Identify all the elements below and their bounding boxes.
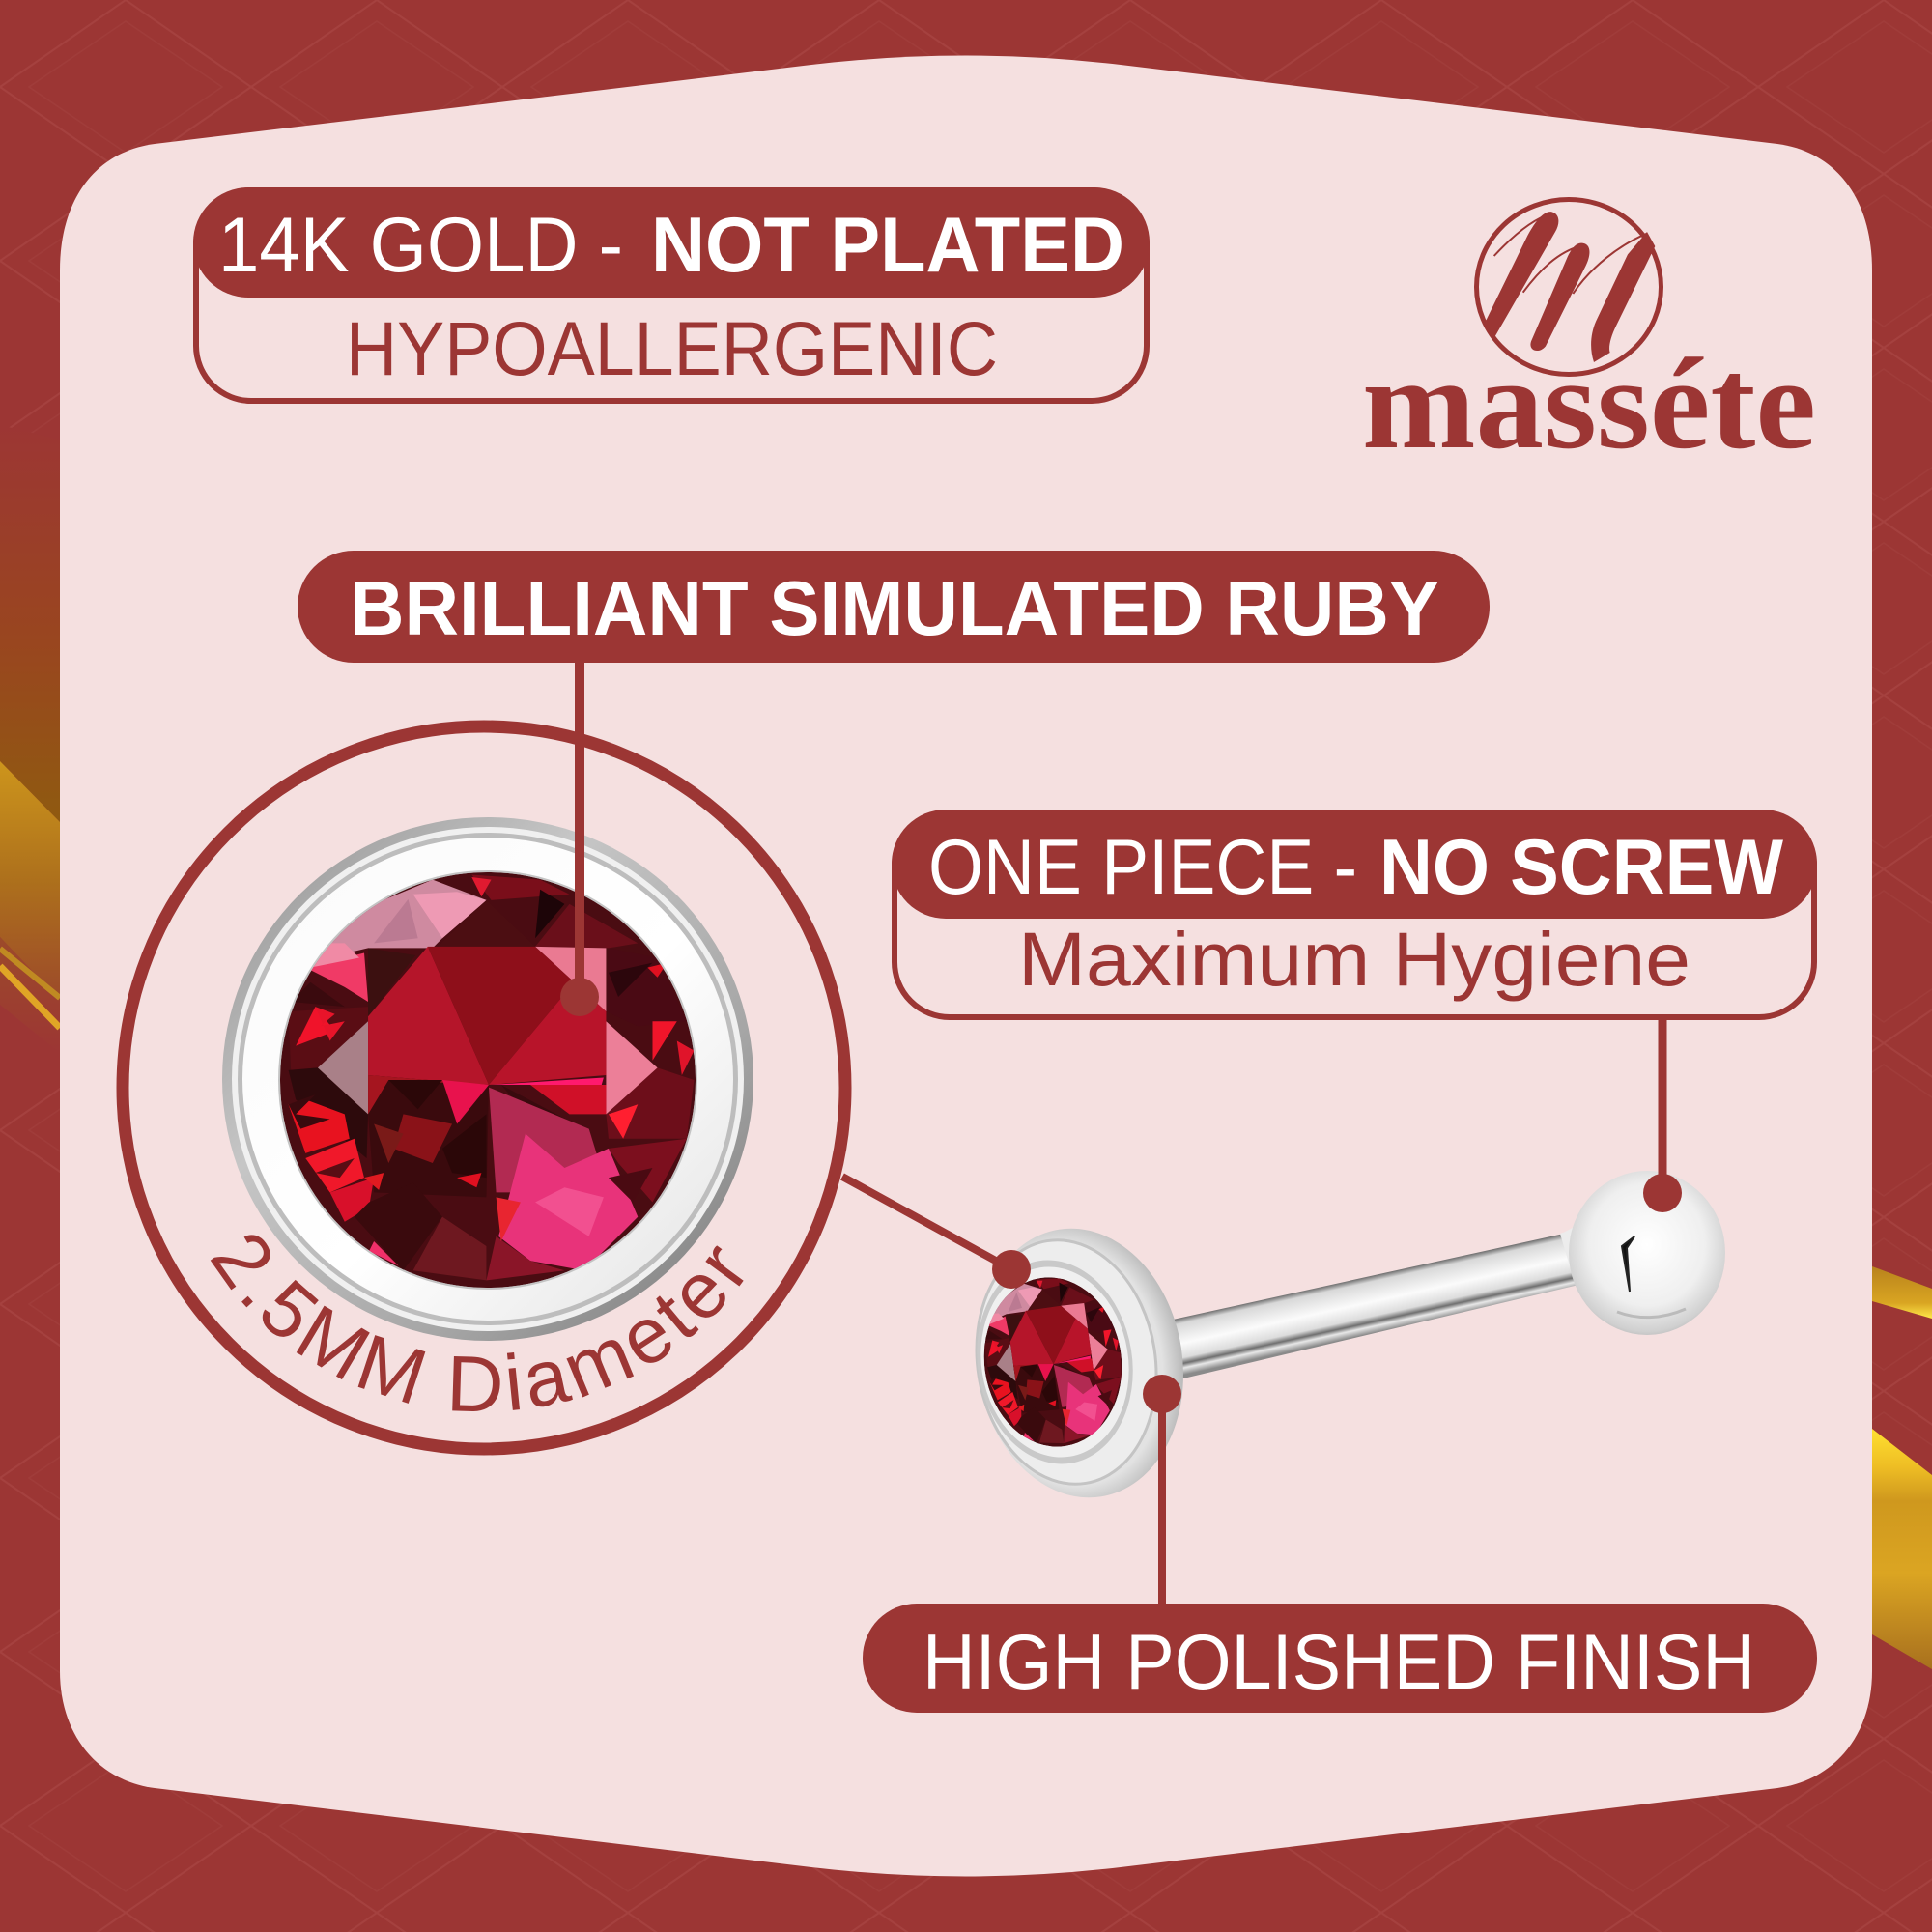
bezel disc xyxy=(957,1213,1203,1513)
callout line: one piece to ball xyxy=(1643,1020,1682,1212)
badge: 14K gold not plated: 14K GOLD - xyxy=(218,202,623,289)
callout line: ruby xyxy=(560,663,599,1016)
enlarged detail circle xyxy=(116,721,852,1455)
metal bezel xyxy=(222,817,753,1341)
logo: massete xyxy=(1362,199,1816,476)
callout line: magnify to stud xyxy=(842,1177,1031,1289)
badge: 14K gold not plated: NOT PLATED xyxy=(651,202,1124,289)
heading: brilliant simulated ruby: BRILLIANT SIMULATED RUBY xyxy=(350,565,1439,651)
small gem xyxy=(973,1268,1133,1456)
badge: one piece no screw xyxy=(892,810,1817,1017)
pin xyxy=(1164,1232,1591,1378)
ruby gem xyxy=(280,872,696,1288)
badge: one piece no screw: Maximum Hygiene xyxy=(1018,916,1690,1002)
logo: massete: masséte xyxy=(1362,332,1816,476)
callout line: polished finish xyxy=(1143,1375,1181,1604)
badge: one piece no screw: ONE PIECE - xyxy=(928,824,1357,911)
badge: high polished finish: HIGH POLISHED FINISH xyxy=(923,1619,1755,1706)
curved diameter label: 2.5MM Diameter xyxy=(211,1235,744,1411)
nose stud product xyxy=(957,1171,1725,1513)
ball end xyxy=(1560,1171,1725,1335)
badge: 14K gold not plated: HYPOALLERGENIC xyxy=(346,305,998,391)
badge: one piece no screw: NO SCREW xyxy=(1379,824,1784,911)
badge: 14K gold not plated xyxy=(193,187,1150,401)
